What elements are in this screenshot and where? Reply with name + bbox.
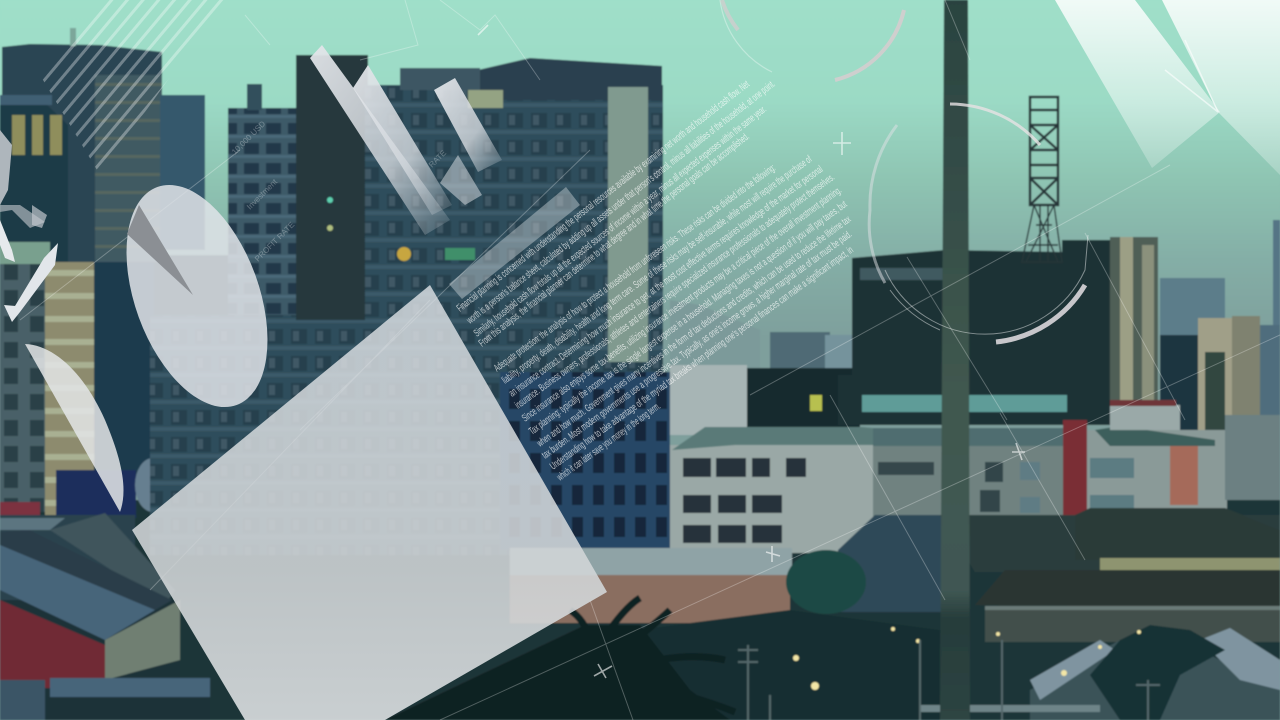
gauge inner thin rings [885,235,1088,334]
overlay: top-right translucent bars [1055,0,1280,175]
dark foreground trees [385,598,940,720]
overlay: financial planning text block, lower: when and how much. Government gives many incentives in the form of tax deductions and credits, which can be used to reduce the lifetime tax [534,213,854,450]
bar 5 [449,187,580,299]
overlay: faint chart labels: PROFIT RATE [253,220,296,263]
overlay: financial planning text block, lower: which it can later save you money in the long term. [554,400,663,484]
brick building [510,548,792,623]
bar highlight line [1165,40,1218,112]
radio mast [1022,97,1062,262]
overlay: financial planning text block, lower: Since insurance also enjoys some tax benefits, utilizing insurance investment products may be a critical piece of the overall investment planning. [520,184,844,424]
base ground fill [0,255,1280,720]
overlay: faint chart labels: RATE [427,148,448,169]
pale building behind panel [380,320,590,560]
lower dark roofs [0,508,1280,720]
overlay: diagonal bar chart strokes [310,45,580,299]
large apartment tower [327,58,663,375]
bottom-left warehouse roofs [0,513,210,720]
bar 1 [310,45,450,235]
bar 3 [434,78,502,172]
overlay: circular gauge arcs [720,0,1088,342]
mid apartment block [150,84,510,560]
overlay: financial planning text block, lower [492,153,856,484]
upper ring, short pink tick [722,0,738,30]
row of terrace buildings [873,400,1280,518]
overlay: financial planning text block, lower: Understanding how to take advantage of the myriad tax breaks when planning one's personal finances can make a significant impact, in [548,244,856,472]
gauge ring, left arc [869,125,897,283]
overlay: financial planning text block, lower: an insurance contract. Determining how much insurance to get, at the most cost effective terms requires knowledge of the market for personal [507,163,825,399]
gauge ring, top arc [950,104,1040,145]
pie slice wedge [127,205,193,295]
tree [786,550,866,614]
street lights [793,627,1141,690]
utility poles [738,640,1160,720]
overlay: financial planning text block, lower: tax burden. Most modern governments use a progressive tax. Typically, as one's income grows, a higher marginal rate of tax must be paid. [540,228,854,461]
overlay: world map fragments [0,130,58,322]
hazy distant skyline [670,300,860,435]
bar right [1162,0,1280,175]
overlay: faint chart labels [230,119,448,263]
overlay: faint chart labels: 10,000 USD [230,119,267,156]
left office tower [2,28,205,262]
overlay: financial planning text block, lower: liability, property, death, disability, health and long term care. Some of these risks may be self-insurable, while most will require the purchase of [500,153,814,386]
palm tree [1090,625,1225,720]
left tan building [0,242,171,519]
overlay: large rotated panel [132,285,607,720]
overlay: financial planning text block, lower: Tax planning: typically the income tax is the single largest expense in a household. Managing taxes is not a question of if you will pay taxes, but [527,198,849,437]
overlay: faint chart labels: Investment [245,177,280,211]
overlay: financial planning text block, lower: Adequate protection: the analysis of how to protect a household from unforeseen risks. These risks can be divided into the following: [492,162,778,374]
white mid-rise building [670,427,873,553]
overlay: financial planning text block, upper [454,78,778,349]
upper ring, thin arc [720,0,772,72]
gauge ring, thick lower arc [996,285,1085,342]
overlay: financial planning text block, lower: insurance. Business owners, professionals, athletes and entertainers require specialized insurance professionals to adequately protect themselves. [513,171,837,411]
overlay: hatch stripes over left tower [40,0,225,175]
dark factory block with green strip [838,237,1158,425]
right-hand towers [1160,220,1280,433]
upper ring, pink arc [835,10,904,80]
dark tower [296,55,368,320]
bar 4 [440,155,482,205]
foreground pole [940,0,970,720]
overlay: lower pie chart segment [25,344,124,512]
overlay: upper pie chart ellipse [99,166,295,426]
overlay: crosshair marks [478,25,1025,678]
bar 2 [353,65,452,215]
bottom-right rooftops [920,628,1280,720]
blue office block [500,372,670,550]
left building with gold windows [0,95,68,265]
bar left [1055,0,1220,168]
